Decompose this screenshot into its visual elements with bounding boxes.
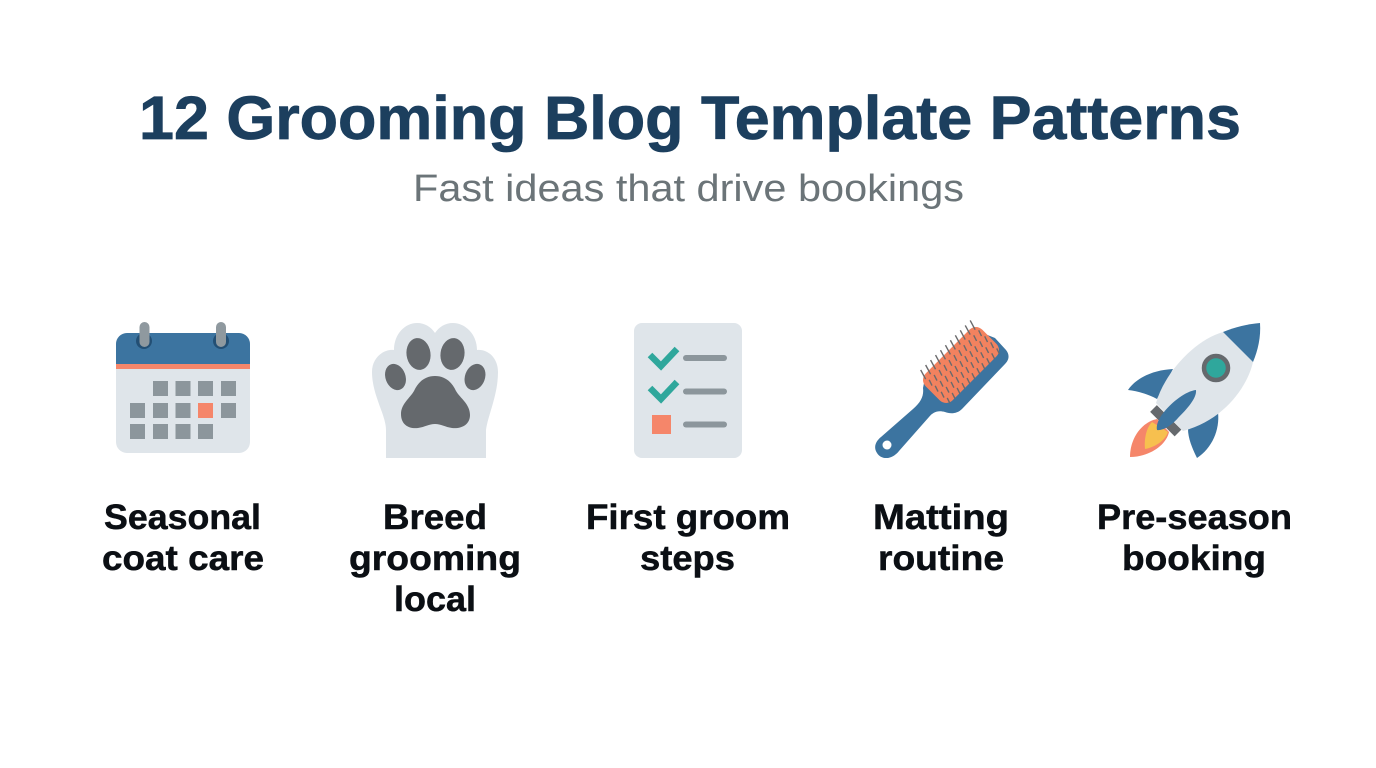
label: breed grooming local	[349, 498, 521, 619]
icon: checklist	[634, 323, 742, 458]
label: breed grooming local: grooming	[349, 539, 521, 578]
label: first groom steps: First groom	[586, 498, 790, 537]
subtitle: Fast ideas that drive bookings	[413, 168, 964, 210]
label: pre-season booking: Pre-season	[1097, 498, 1292, 537]
label: pre-season booking	[1097, 498, 1292, 578]
label: seasonal coat care: Seasonal	[104, 498, 261, 537]
title: 12 Grooming Blog Template Patterns	[139, 84, 1241, 152]
label: seasonal coat care	[102, 498, 264, 578]
label: matting routine: routine	[878, 539, 1004, 578]
label: first groom steps	[586, 498, 790, 578]
icon: calendar	[116, 322, 250, 453]
label: seasonal coat care: coat care	[102, 539, 264, 578]
label: breed grooming local: Breed	[383, 498, 487, 537]
icon: rocket	[1128, 323, 1260, 458]
label: first groom steps: steps	[640, 539, 735, 578]
label: pre-season booking: booking	[1122, 539, 1266, 578]
bristles: outer row	[919, 320, 977, 379]
label: breed grooming local: local	[394, 580, 476, 619]
icon: brush	[875, 319, 1009, 458]
label: matting routine: Matting	[873, 498, 1009, 537]
label: matting routine	[873, 498, 1009, 578]
icon: paw	[372, 323, 498, 458]
